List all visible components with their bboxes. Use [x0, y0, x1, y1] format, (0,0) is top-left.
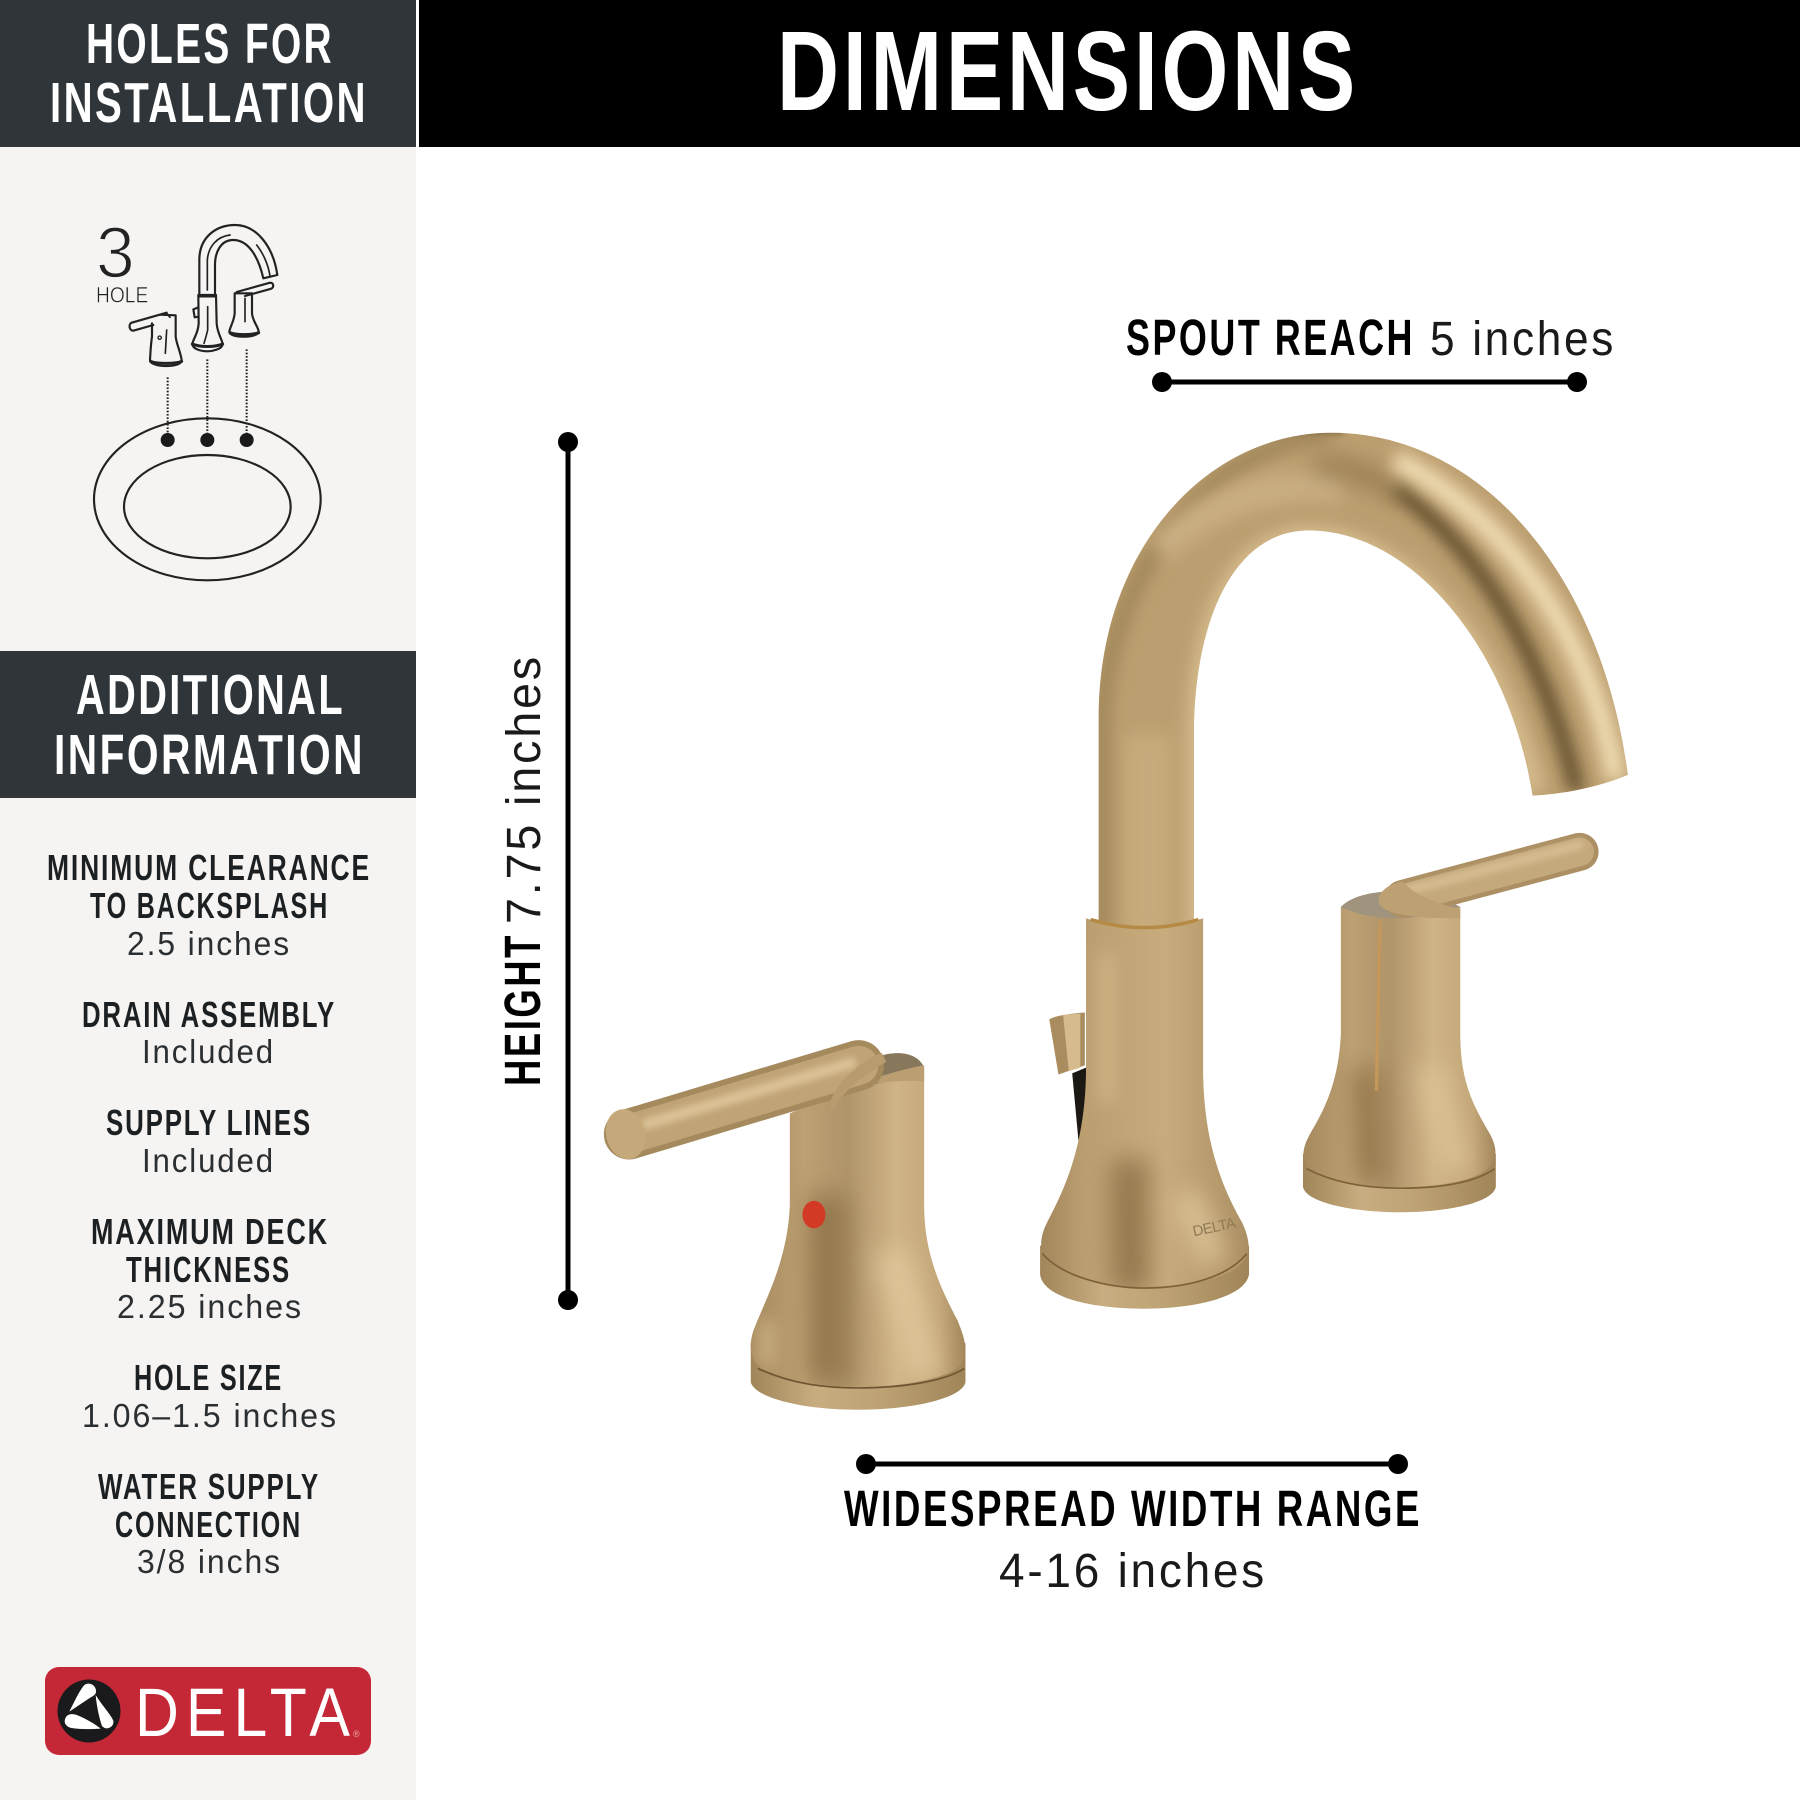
- heading: additional information: INFORMATION: [54, 723, 365, 787]
- dimension: height: 7.75 inches: [498, 654, 551, 924]
- dimension: height: HEIGHT: [494, 933, 551, 1086]
- pop-up lever: [1049, 1013, 1086, 1148]
- heading: additional information: [0, 651, 416, 798]
- logo: Delta: ®: [353, 1729, 360, 1739]
- heading: holes for installation: INSTALLATION: [50, 71, 368, 135]
- dimension: spout reach: [1126, 309, 1616, 392]
- text block: drain assembly: Included: [142, 1033, 275, 1070]
- text block: minimum clearance: TO BACKSPLASH: [90, 885, 329, 926]
- right handle: [1303, 845, 1580, 1212]
- body centre: DELTA: [1191, 1215, 1237, 1240]
- text block: hole size: [82, 1357, 338, 1434]
- icon: three hole sink diagram: HOLE: [96, 283, 148, 308]
- text block: maximum deck thickness: MAXIMUM DECK: [91, 1211, 329, 1252]
- dimension: widespread width range: WIDESPREAD WIDTH RANGE: [844, 1480, 1422, 1537]
- text block: drain assembly: [82, 994, 336, 1070]
- base plate centre: [1040, 1246, 1249, 1309]
- text block: minimum clearance: MINIMUM CLEARANCE: [47, 847, 371, 888]
- heading: holes for installation: [0, 0, 416, 147]
- heading: holes for installation: HOLES FOR: [86, 12, 334, 76]
- text block: water supply connection: WATER SUPPLY: [98, 1466, 320, 1507]
- text block: water supply connection: 3/8 inchs: [137, 1543, 282, 1580]
- text block: maximum deck thickness: 2.25 inches: [117, 1288, 303, 1325]
- dimension: spout reach: 5 inches: [1430, 313, 1616, 366]
- icon: three hole sink diagram: [94, 212, 321, 580]
- text block: drain assembly: DRAIN ASSEMBLY: [82, 994, 336, 1035]
- logo: Delta: DELTA: [135, 1674, 357, 1751]
- text block: maximum deck thickness: [91, 1211, 329, 1325]
- text block: supply lines: SUPPLY LINES: [106, 1102, 312, 1143]
- dimension: spout reach: SPOUT REACH: [1126, 309, 1415, 366]
- dimension: widespread width range: [844, 1454, 1422, 1598]
- heading: additional information: ADDITIONAL: [76, 663, 345, 727]
- text block: water supply connection: [98, 1466, 320, 1580]
- heading: dimensions banner: DIMENSIONS: [777, 8, 1359, 134]
- dimension: height: [494, 432, 578, 1310]
- panel: left sidebar: [0, 0, 416, 1800]
- text block: minimum clearance: [47, 847, 371, 962]
- text block: water supply connection: CONNECTION: [115, 1504, 302, 1545]
- icon: three hole sink diagram: 3: [96, 212, 135, 293]
- text block: supply lines: Included: [142, 1142, 275, 1179]
- heading: dimensions banner: [419, 0, 1800, 147]
- text block: minimum clearance: 2.5 inches: [127, 925, 291, 962]
- text block: maximum deck thickness: THICKNESS: [126, 1249, 291, 1290]
- body centre: [1041, 918, 1249, 1292]
- image: faucet: [601, 430, 1628, 1410]
- text block: hole size: 1.06–1.5 inches: [82, 1397, 338, 1434]
- spout: [1099, 430, 1628, 936]
- logo: Delta: [45, 1667, 371, 1755]
- text block: hole size: HOLE SIZE: [134, 1357, 283, 1398]
- left handle: [601, 1053, 965, 1410]
- dimension: widespread width range: 4-16 inches: [999, 1545, 1267, 1598]
- text block: supply lines: [106, 1102, 312, 1179]
